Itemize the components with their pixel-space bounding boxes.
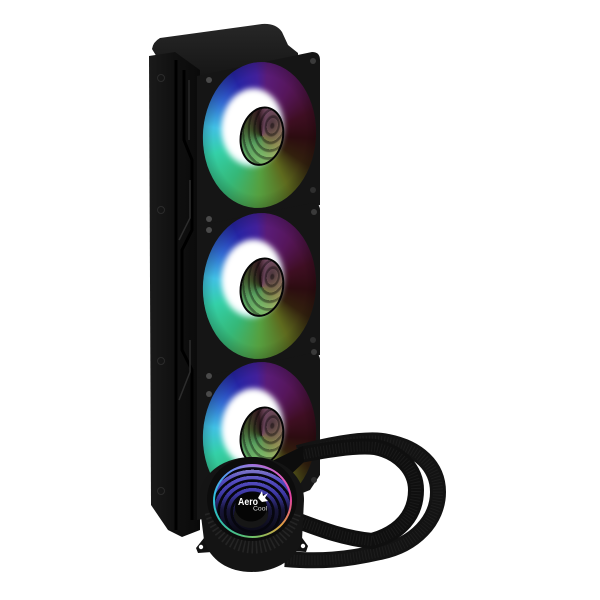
fan frame 2 — [197, 203, 320, 385]
logo icon: leaf — [258, 491, 268, 502]
fan 1 RGB ring and infinity hub — [198, 58, 321, 212]
pump body — [199, 457, 304, 572]
fan frame 1 — [197, 52, 320, 235]
pump mounting ears — [196, 535, 308, 553]
radiator screws — [158, 74, 164, 494]
tube fitting — [270, 446, 304, 480]
fan 2 RGB ring and infinity hub — [198, 209, 321, 363]
fan frame 3 — [197, 349, 320, 520]
logo text: Aero: Aero — [238, 496, 258, 508]
pump infinity mirror glass — [213, 464, 292, 538]
radiator fins — [176, 60, 192, 530]
radiator top cap — [152, 24, 298, 90]
tube: inner loop — [296, 446, 416, 541]
radiator side panel — [149, 52, 200, 537]
tube: outer loop — [285, 440, 438, 560]
fan 3 RGB ring and infinity hub — [198, 358, 321, 512]
logo text: Cool: Cool — [253, 506, 268, 512]
